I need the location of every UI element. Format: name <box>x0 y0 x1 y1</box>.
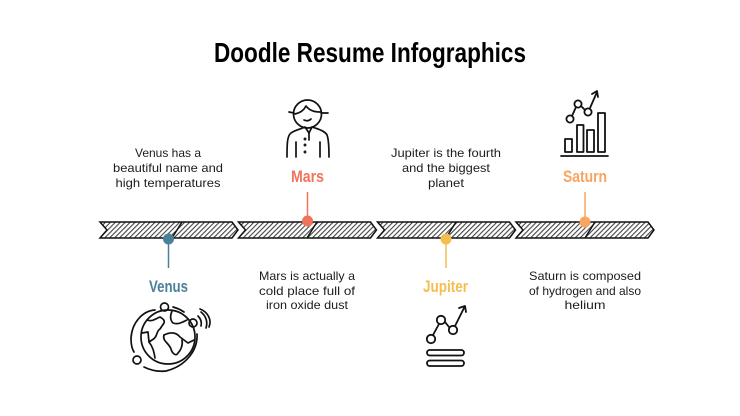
icon: person <box>287 100 329 157</box>
text block: Mars: iron oxide dust <box>266 298 349 312</box>
heading: Mars: Mars <box>291 167 324 186</box>
icon: globe <box>131 303 210 371</box>
text block: Saturn: of hydrogen and also <box>529 284 641 298</box>
connector: Venus <box>163 234 174 268</box>
heading: Venus: Venus <box>149 277 188 296</box>
text block: Venus: Venus has a <box>135 146 201 160</box>
text block: Saturn <box>529 269 641 312</box>
connector: Saturn <box>580 192 590 228</box>
heading: Jupiter: Jupiter <box>423 277 468 296</box>
icon: chart with pills <box>427 306 466 366</box>
text block: Saturn: helium <box>564 298 606 312</box>
text block: Mars: Mars is actually a <box>259 269 355 283</box>
title: Doodle Resume Infographics <box>214 37 526 68</box>
heading: Saturn: Saturn <box>563 167 607 186</box>
text block: Venus: high temperatures <box>116 176 220 190</box>
text block: Jupiter <box>391 146 501 190</box>
connector: Mars <box>302 192 313 226</box>
connector: Jupiter <box>440 234 452 268</box>
text block: Jupiter: and the biggest <box>402 161 491 175</box>
text block: Mars <box>259 269 356 312</box>
text block: Mars: cold place full of <box>259 284 356 298</box>
text block: Jupiter: planet <box>428 176 465 190</box>
text block: Venus <box>113 146 223 190</box>
text block: Jupiter: Jupiter is the fourth <box>391 146 501 160</box>
text block: Saturn: Saturn is composed <box>529 269 641 283</box>
text block: Venus: beautiful name and <box>113 161 223 175</box>
icon: growth bar chart <box>561 91 608 156</box>
timeline arrows <box>100 222 654 238</box>
